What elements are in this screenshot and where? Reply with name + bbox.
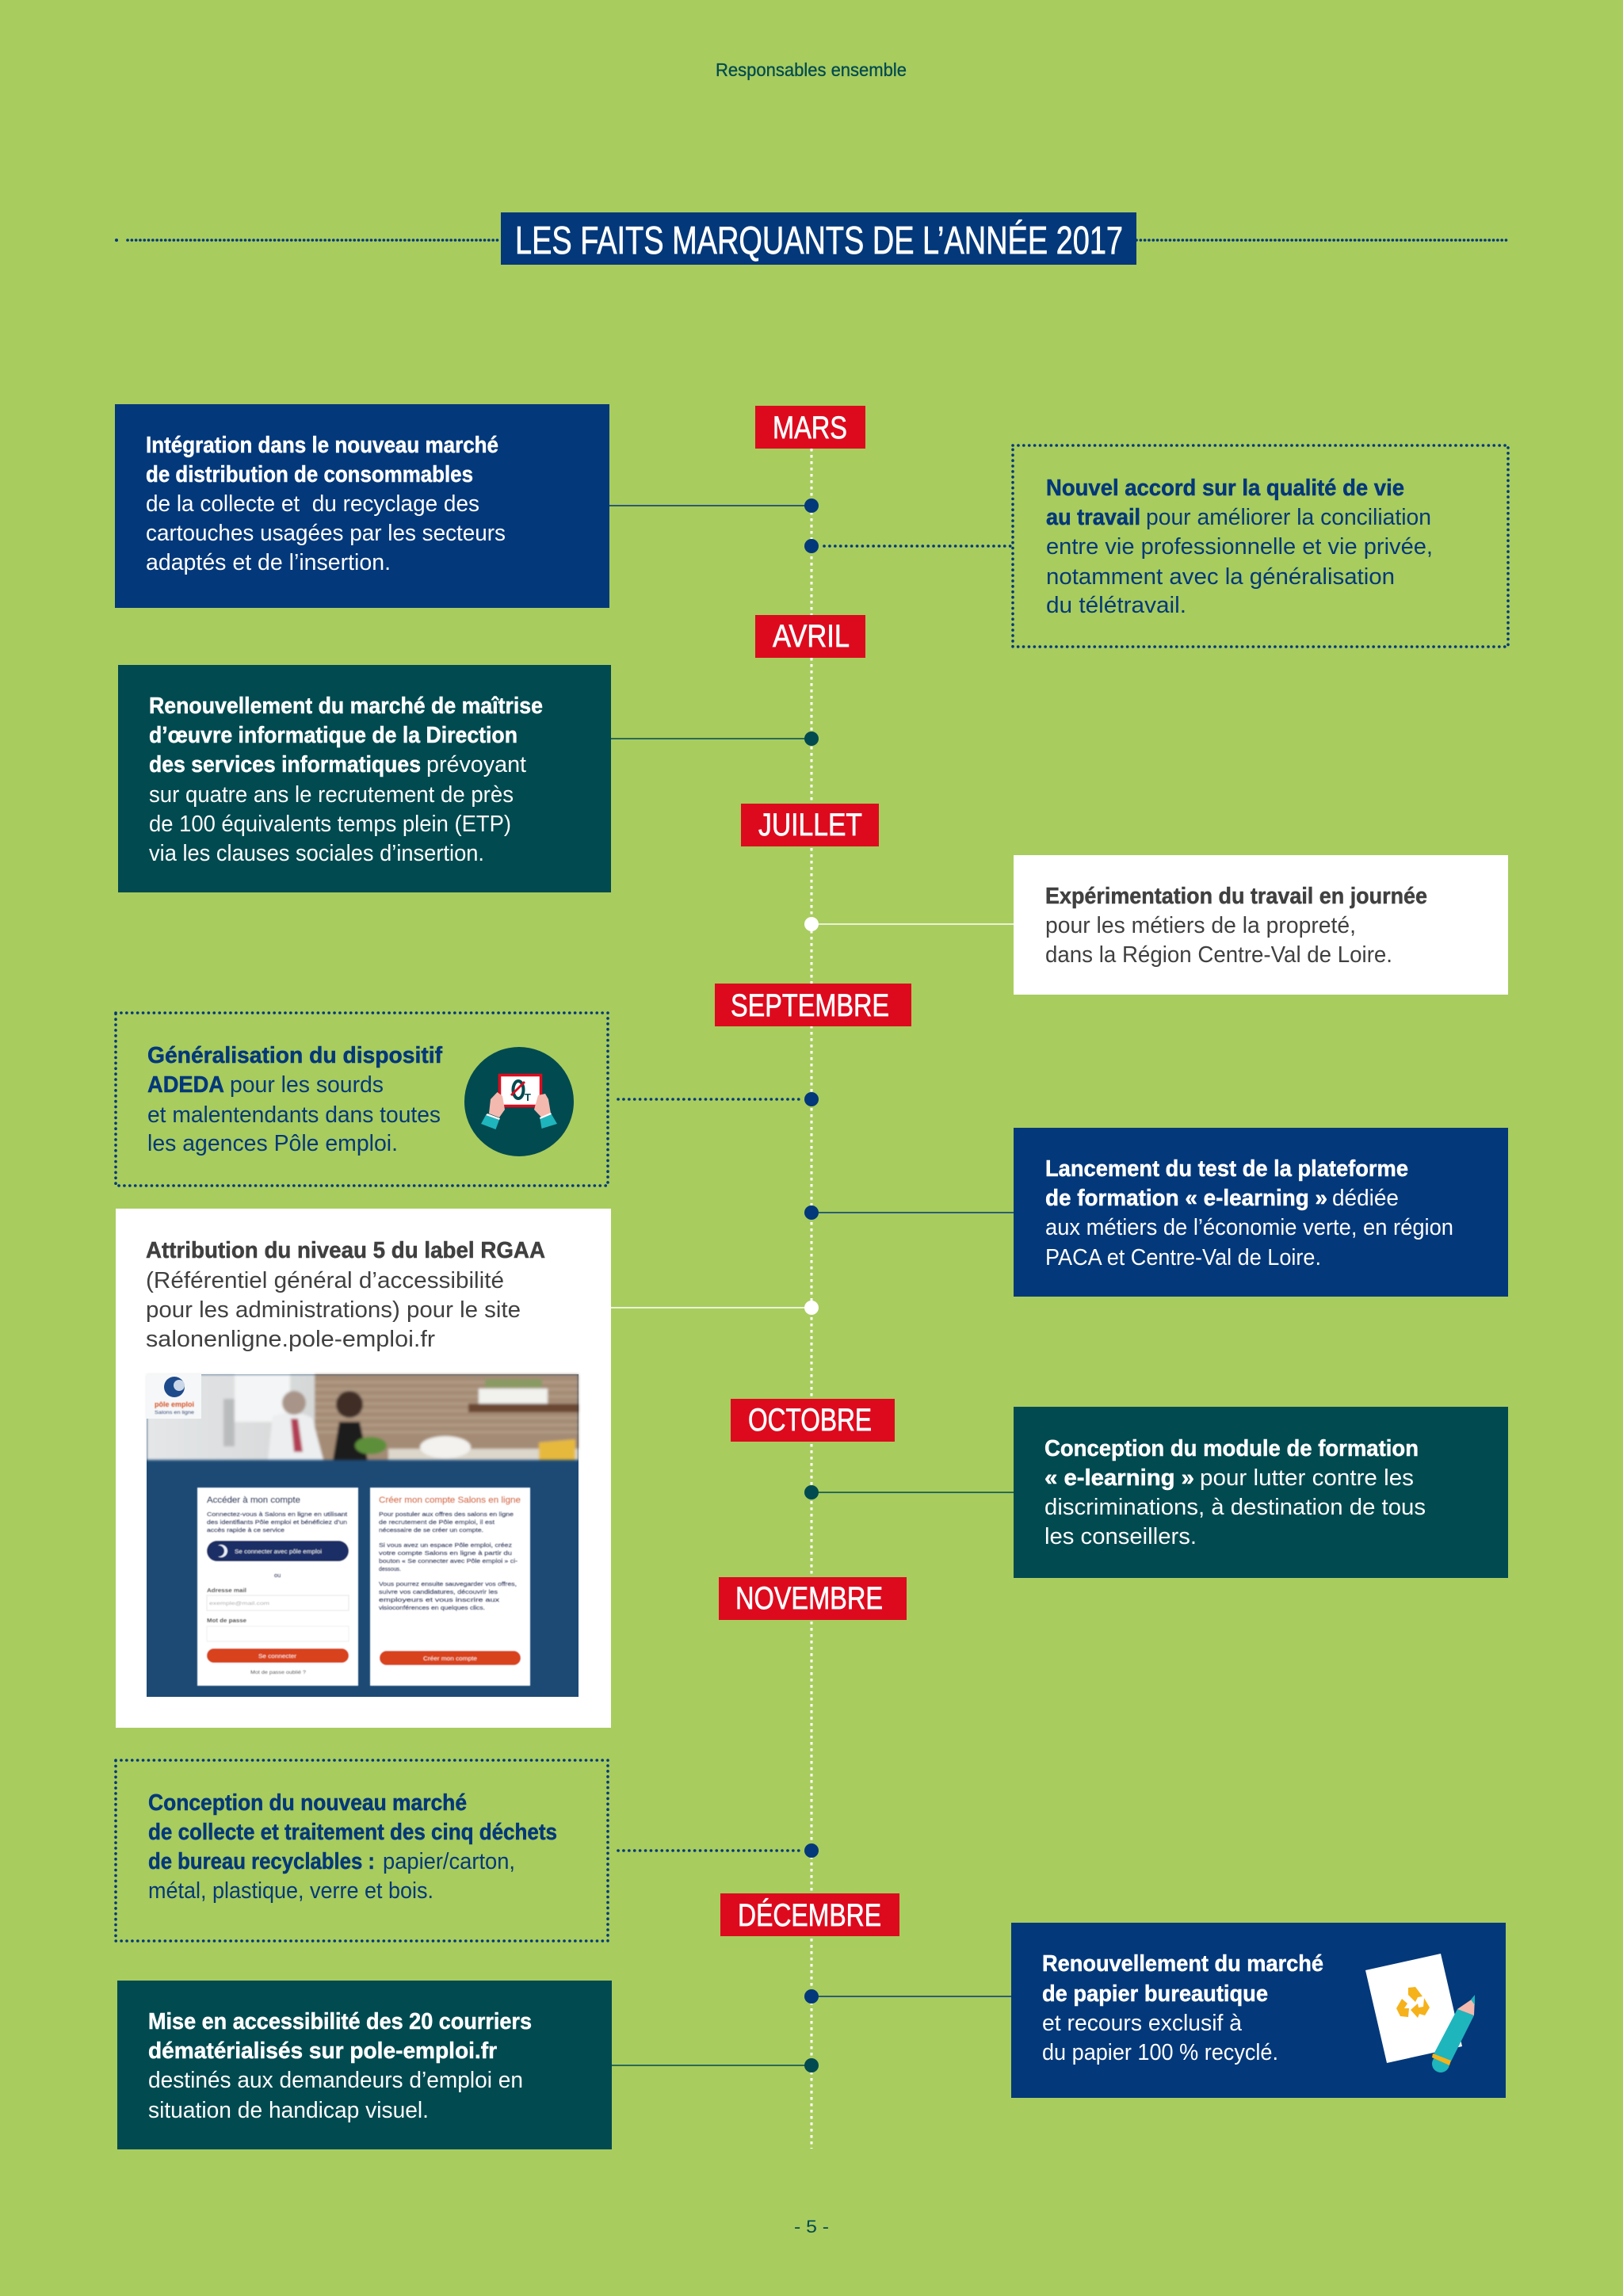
text: label RGAA: salonenligne.pole-emploi.fr xyxy=(146,1327,435,1352)
login card: des identifiants Pôle emploi et bénéficiez d’un xyxy=(207,1519,347,1526)
month label: JUILLET xyxy=(741,804,879,846)
text: label RGAA xyxy=(146,1238,545,1352)
panel: dispositif ADEDA xyxy=(116,1013,608,1186)
create account card: Créer mon compte Salons en ligne xyxy=(379,1496,521,1505)
text: plateforme e-learning: aux métiers de l’économie verte, en région xyxy=(1045,1215,1453,1240)
connector: module e-learning xyxy=(812,1492,1014,1493)
logo Pôle emploi xyxy=(147,1374,201,1419)
text: marché de consommables: adaptés et de l’insertion. xyxy=(146,550,391,575)
text: accord qualité de vie: notamment avec la généralisation xyxy=(1046,564,1395,590)
create account card: dessous. xyxy=(379,1565,401,1572)
text: plateforme e-learning: dédiée xyxy=(1332,1186,1399,1211)
text: accord qualité de vie xyxy=(1046,476,1433,618)
text: maîtrise d'oeuvre informatique xyxy=(149,693,543,866)
text: papier bureautique: Renouvellement du marché xyxy=(1042,1951,1323,1977)
panel: plateforme e-learning xyxy=(1014,1128,1508,1297)
create account card: votre compte Salons en ligne à partir du xyxy=(379,1549,512,1557)
text: papier bureautique: du papier 100 % recyclé. xyxy=(1042,2040,1278,2065)
month label: DÉCEMBRE: DÉCEMBRE xyxy=(738,1897,881,1933)
text: marché de consommables: Intégration dans le nouveau marché xyxy=(146,433,498,458)
connector: papier bureautique xyxy=(812,1996,1011,1997)
connector: accord qualité de vie xyxy=(824,544,1012,548)
text: accord qualité de vie: du télétravail. xyxy=(1046,593,1186,618)
text: maîtrise d'oeuvre informatique: des services informatiques xyxy=(149,752,421,777)
text: papier bureautique xyxy=(1042,1951,1323,2065)
screenshot: salon en ligne login page xyxy=(147,1374,579,1697)
login card: ou xyxy=(274,1572,281,1579)
login card: Mot de passe oublié ? xyxy=(250,1671,307,1675)
text: courriers dématérialisés: destinés aux demandeurs d’emploi en xyxy=(148,2068,523,2093)
create account card: Si vous avez un espace Pôle emploi, créez xyxy=(379,1541,512,1549)
text: travail en journée: pour les métiers de la propreté, xyxy=(1045,913,1356,938)
title banner: LES FAITS MARQUANTS DE L’ANNÉE 2017 xyxy=(515,220,1123,262)
connector: mars marché consommables xyxy=(609,505,812,506)
text: plateforme e-learning: PACA et Centre-Val de Loire. xyxy=(1045,1245,1321,1270)
create account card: nécessaire de se créer un compte. xyxy=(379,1526,483,1534)
month label: AVRIL xyxy=(755,615,865,658)
text: courriers dématérialisés: Mise en accessibilité des 20 courriers xyxy=(148,2009,532,2034)
text: dispositif ADEDA: Généralisation du dispositif xyxy=(147,1043,442,1068)
panel: papier bureautique xyxy=(1011,1923,1506,2098)
panel: déchets recyclables xyxy=(116,1760,608,1941)
month label: NOVEMBRE: NOVEMBRE xyxy=(735,1581,883,1616)
text: maîtrise d'oeuvre informatique: via les clauses sociales d’insertion. xyxy=(149,841,484,866)
text: accord qualité de vie: au travail xyxy=(1046,505,1140,530)
login card xyxy=(197,1488,358,1686)
create account card xyxy=(370,1488,530,1686)
panel: label RGAA xyxy=(116,1209,611,1728)
month label: OCTOBRE: OCTOBRE xyxy=(748,1403,872,1438)
text: marché de consommables: de la collecte et du recyclage des xyxy=(146,491,479,517)
text: accord qualité de vie: Nouvel accord sur la qualité de vie xyxy=(1046,476,1404,501)
header: running title: Responsables ensemble xyxy=(716,59,907,80)
text: courriers dématérialisés xyxy=(148,2009,532,2123)
login card: accès rapide à ce service xyxy=(207,1526,285,1534)
login card: Connectez-vous à Salons en ligne en utilisant xyxy=(207,1511,348,1518)
text: marché de consommables xyxy=(146,433,506,575)
text: dispositif ADEDA: ADEDA xyxy=(147,1072,224,1098)
create account card: Pour postuler aux offres des salons en ligne xyxy=(379,1511,514,1518)
connector: RGAA xyxy=(610,1307,812,1308)
text: courriers dématérialisés: dématérialisés sur pole-emploi.fr xyxy=(148,2038,497,2064)
month label: MARS: MARS xyxy=(773,411,847,445)
text: plateforme e-learning: de formation « e-learning » xyxy=(1045,1186,1327,1211)
create account card: visioconférences en quelques clics. xyxy=(379,1604,485,1611)
text: module e-learning: pour lutter contre les xyxy=(1200,1465,1414,1491)
text: module e-learning: discriminations, à destination de tous xyxy=(1044,1495,1426,1520)
icon: hands holding tablet with hearing symbol: T xyxy=(525,1091,531,1103)
connector: plateforme e-learning xyxy=(812,1212,1014,1213)
text: déchets recyclables: Conception du nouveau marché xyxy=(148,1790,467,1816)
text: papier bureautique: et recours exclusif à xyxy=(1042,2011,1243,2036)
text: travail en journée: Expérimentation du travail en journée xyxy=(1045,884,1427,909)
text: maîtrise d'oeuvre informatique: de 100 équivalents temps plein (ETP) xyxy=(149,812,511,837)
text: maîtrise d'oeuvre informatique: d’œuvre informatique de la Direction xyxy=(149,723,517,748)
text: courriers dématérialisés: situation de handicap visuel. xyxy=(148,2098,429,2123)
text: module e-learning: « e-learning » xyxy=(1044,1465,1194,1491)
panel: module e-learning xyxy=(1014,1407,1508,1578)
panel: maîtrise d'oeuvre informatique xyxy=(118,665,611,892)
create account card: bouton « Se connecter avec Pôle emploi » ci- xyxy=(379,1557,518,1564)
text: marché de consommables: de distribution de consommables xyxy=(146,462,473,487)
text: accord qualité de vie: entre vie professionnelle et vie privée, xyxy=(1046,534,1433,560)
text: accord qualité de vie: pour améliorer la conciliation xyxy=(1146,505,1431,530)
text: maîtrise d'oeuvre informatique: Renouvellement du marché de maîtrise xyxy=(149,693,543,719)
text: maîtrise d'oeuvre informatique: sur quatre ans le recrutement de près xyxy=(149,782,514,808)
panel: courriers dématérialisés xyxy=(117,1981,612,2149)
text: déchets recyclables xyxy=(148,1790,557,1904)
text: plateforme e-learning: Lancement du test de la plateforme xyxy=(1045,1156,1408,1182)
text: module e-learning: Conception du module de formation xyxy=(1044,1436,1419,1461)
timeline nodes xyxy=(804,499,819,2073)
month label: JUILLET: JUILLET xyxy=(758,808,862,842)
text: déchets recyclables: papier/carton, xyxy=(383,1849,515,1874)
create account card: suivre vos candidatures, découvrir les xyxy=(379,1588,498,1595)
text: label RGAA: Attribution du niveau 5 du label RGAA xyxy=(146,1238,545,1263)
text: dispositif ADEDA: les agences Pôle emploi. xyxy=(147,1131,398,1156)
text: dispositif ADEDA: pour les sourds xyxy=(230,1072,384,1098)
month label: AVRIL: AVRIL xyxy=(773,619,850,654)
text: dispositif ADEDA xyxy=(147,1043,442,1156)
photo banner xyxy=(147,1374,579,1460)
month label: DÉCEMBRE xyxy=(720,1893,899,1936)
title banner xyxy=(115,212,1507,265)
month label: OCTOBRE xyxy=(731,1399,895,1442)
connector: déchets recyclables xyxy=(618,1849,802,1852)
login card: Se connecter xyxy=(258,1654,297,1660)
create account card: Créer mon compte xyxy=(423,1656,477,1662)
text: travail en journée xyxy=(1045,884,1427,968)
text: papier bureautique: de papier bureautique xyxy=(1042,1981,1268,2007)
month label: SEPTEMBRE: SEPTEMBRE xyxy=(731,988,889,1023)
connector: maîtrise d'oeuvre xyxy=(610,738,812,739)
login card: Accéder à mon compte xyxy=(207,1496,300,1505)
page number: - 5 - xyxy=(794,2217,829,2237)
create account card: de recrutement de Pôle emploi, il est xyxy=(379,1519,495,1526)
login card: Adresse mail xyxy=(207,1587,246,1594)
text: travail en journée: dans la Région Centre-Val de Loire. xyxy=(1045,942,1392,968)
text: module e-learning: les conseillers. xyxy=(1044,1524,1197,1549)
text: label RGAA: (Référentiel général d’accessibilité xyxy=(146,1268,504,1293)
text: marché de consommables: cartouches usagées par les secteurs xyxy=(146,521,506,546)
text: déchets recyclables: de collecte et traitement des cinq déchets xyxy=(148,1820,557,1845)
connector: travail en journée xyxy=(812,923,1014,925)
create account card: employeurs et vous inscrire aux xyxy=(379,1596,499,1603)
text: module e-learning xyxy=(1044,1436,1426,1549)
icon: hands holding tablet with hearing symbol xyxy=(464,1047,574,1156)
create account card: Vous pourrez ensuite sauvegarder vos offres, xyxy=(379,1580,517,1587)
panel: travail en journée xyxy=(1014,855,1508,995)
timeline spine xyxy=(810,449,813,2149)
logo Pôle emploi: pôle emploi xyxy=(155,1400,194,1408)
icon: recycled paper and pencil xyxy=(1365,1954,1475,2073)
month label: MARS xyxy=(755,406,865,449)
text: dispositif ADEDA: et malentendants dans toutes xyxy=(147,1102,441,1128)
login card: Mot de passe xyxy=(207,1617,246,1624)
panel: accord qualité de vie xyxy=(1013,445,1508,647)
login card: exemple@mail.com xyxy=(209,1602,269,1606)
text: label RGAA: pour les administrations) pour le site xyxy=(146,1297,521,1323)
text: déchets recyclables: de bureau recyclables : xyxy=(148,1849,375,1874)
logo Pôle emploi: Salons en ligne xyxy=(155,1411,195,1415)
text: maîtrise d'oeuvre informatique: prévoyant xyxy=(426,752,526,777)
connector: courriers dématérialisés xyxy=(612,2065,812,2066)
connector: ADEDA xyxy=(618,1098,802,1101)
text: plateforme e-learning xyxy=(1045,1156,1453,1270)
login card: Se connecter avec pôle emploi xyxy=(235,1549,322,1555)
text: déchets recyclables: métal, plastique, verre et bois. xyxy=(148,1878,433,1904)
panel: marché de consommables xyxy=(115,404,609,608)
